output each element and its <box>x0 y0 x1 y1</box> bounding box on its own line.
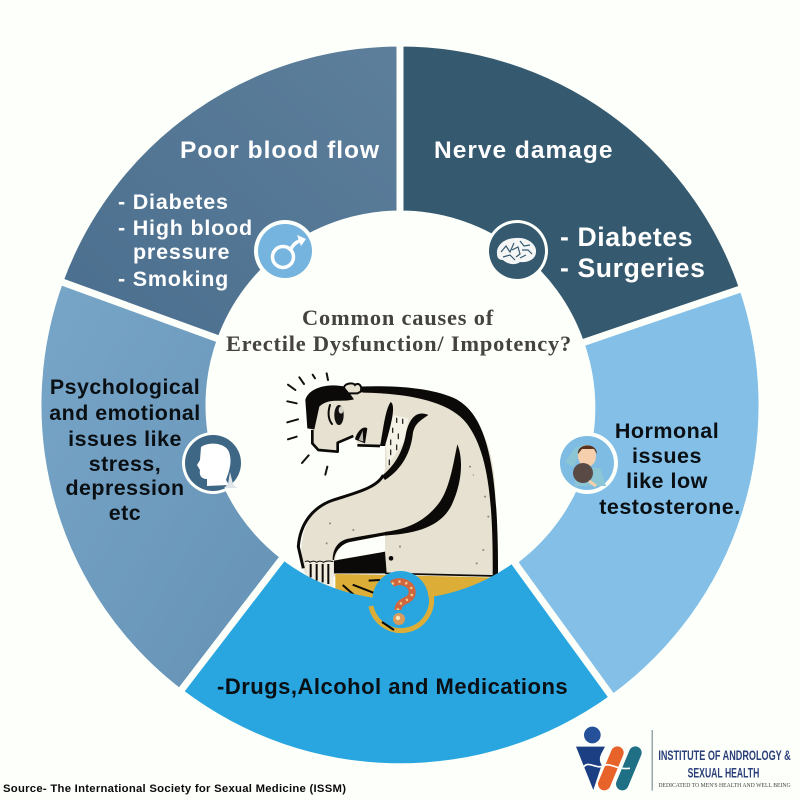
icon: male symbol <box>254 220 316 282</box>
icon: question mark of pills <box>371 571 432 631</box>
icon: head silhouette <box>182 432 244 494</box>
heading: poor blood flow: Poor blood flow <box>180 137 380 164</box>
title: Common causes of <box>302 305 494 330</box>
logo: Institute of Andrology and Sexual Health <box>576 727 791 791</box>
text: psychological issues: stress, <box>89 452 161 476</box>
text: nerve damage causes: - Surgeries <box>560 253 706 283</box>
text: hormonal issues: Hormonal <box>615 419 719 443</box>
text: poor blood flow causes: - High blood <box>118 216 253 240</box>
text: nerve damage causes: - Diabetes <box>560 222 693 252</box>
text: psychological issues <box>49 375 201 525</box>
panel: nerve damage <box>400 43 743 343</box>
text: psychological issues: depression <box>65 476 185 500</box>
source note: Source- The International Society for Sexual Medicine (ISSM) <box>3 783 346 795</box>
panel: hormonal issues <box>512 288 762 698</box>
text: poor blood flow causes: - Diabetes <box>118 190 229 214</box>
text: hormonal issues: issues <box>632 444 702 468</box>
text: hormonal issues: testosterone. <box>599 495 741 519</box>
text: poor blood flow causes: - Smoking <box>118 267 229 291</box>
text: psychological issues: Psychological <box>50 375 200 399</box>
text: poor blood flow causes: pressure <box>133 240 230 264</box>
heading: nerve damage: Nerve damage <box>434 137 614 164</box>
text: psychological issues: etc <box>109 501 141 525</box>
text: drugs, alcohol and medications: -Drugs,Alcohol and Medications <box>217 674 568 699</box>
illustration: stressed man bent forward <box>287 373 498 608</box>
panel: psychological issues <box>38 281 284 692</box>
text: hormonal issues <box>599 419 741 519</box>
text: nerve damage causes <box>560 222 706 283</box>
title <box>226 305 572 356</box>
panel: drugs, alcohol and medications <box>182 559 611 763</box>
text: hormonal issues: like low <box>626 469 708 493</box>
icon: brain <box>486 220 548 282</box>
icon: worried man <box>556 432 618 494</box>
panel: poor blood flow <box>60 43 400 340</box>
text: psychological issues: issues like <box>68 427 182 451</box>
text: poor blood flow causes <box>118 190 253 291</box>
text: psychological issues: and emotional <box>49 401 201 425</box>
title: Erectile Dysfunction/ Impotency? <box>226 331 572 356</box>
